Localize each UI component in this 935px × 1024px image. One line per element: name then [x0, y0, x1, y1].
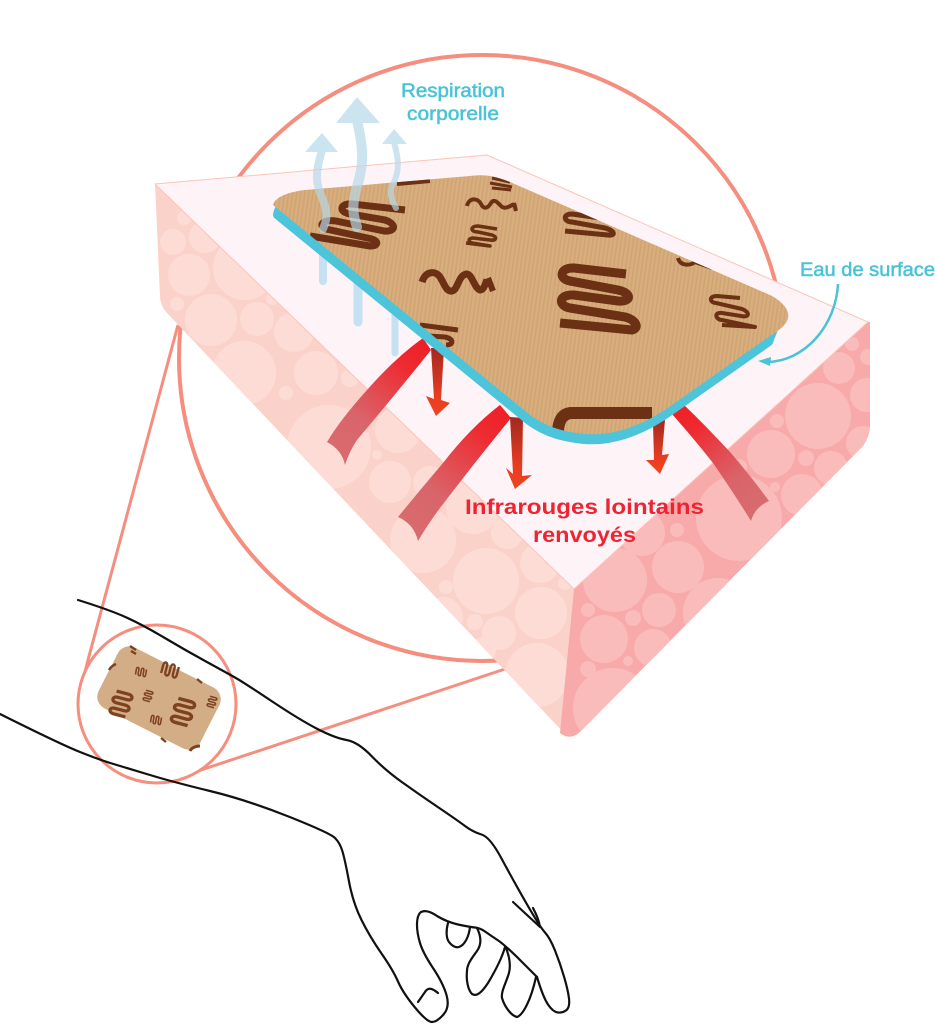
patch — [273, 175, 788, 440]
far-infrared ribbons — [327, 338, 769, 541]
right skin face — [560, 322, 884, 748]
label: body respiration: Respiration — [401, 81, 505, 102]
skin block — [155, 155, 884, 748]
patch logo marks — [310, 178, 755, 440]
small patch logo marks — [109, 646, 217, 751]
down arrow 1 — [426, 348, 450, 416]
body respiration arrows — [305, 97, 407, 229]
label: body respiration — [401, 81, 505, 125]
down arrow 3 — [646, 420, 669, 474]
label: far infrared returned: renvoyés — [533, 524, 636, 547]
label: far infrared returned: Infrarouges lointains — [465, 496, 704, 519]
fingernail — [418, 989, 438, 1002]
finger lines — [447, 923, 470, 947]
label: surface water: Eau de surface — [800, 260, 935, 281]
label: far infrared returned — [465, 496, 704, 547]
upper arm line — [78, 600, 569, 1013]
lower arm line and thumb — [0, 714, 537, 1022]
large zoom circle — [179, 55, 785, 661]
top skin face — [155, 155, 868, 589]
arm and hand outline — [0, 600, 569, 1022]
small circle on forearm — [78, 625, 236, 783]
zoom connector lines — [78, 325, 505, 771]
arrow: surface water pointer — [758, 284, 838, 366]
lower stems of body respiration arrows — [323, 225, 395, 353]
left skin face — [155, 184, 574, 732]
small patch on arm — [93, 642, 225, 754]
down arrow 2 — [506, 417, 532, 489]
knuckle crease — [513, 902, 540, 927]
surface water layer — [277, 181, 777, 440]
label: body respiration: corporelle — [407, 104, 499, 125]
